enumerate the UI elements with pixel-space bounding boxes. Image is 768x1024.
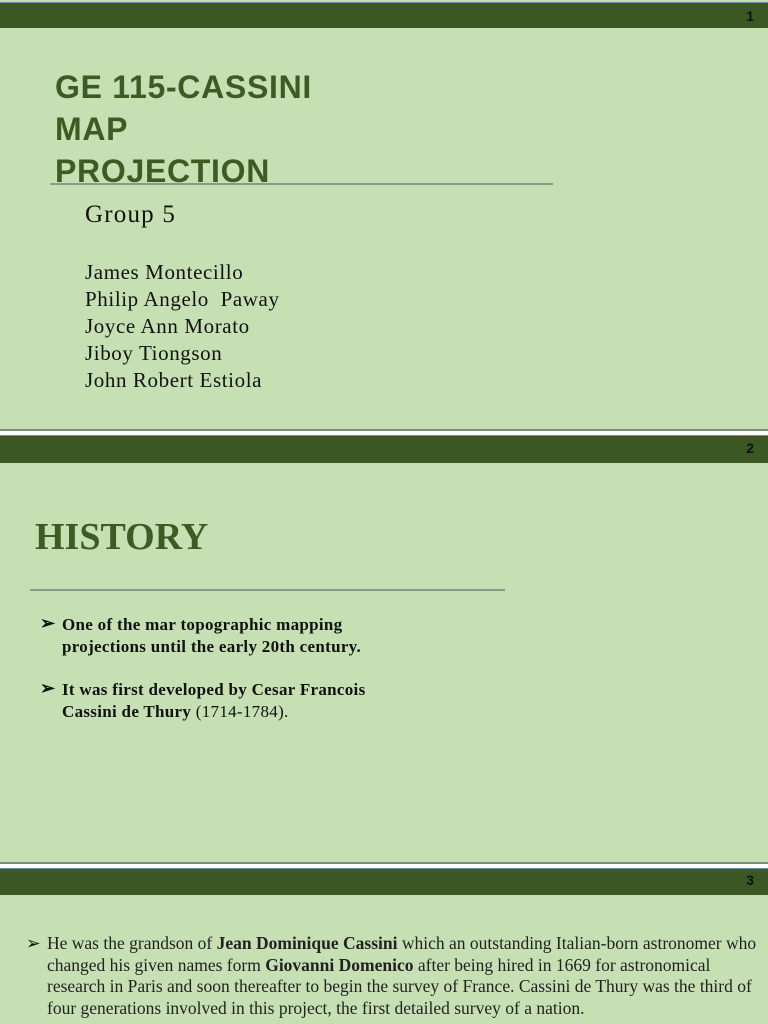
paragraph: ➢ xyxy=(26,933,41,953)
paragraph: four generations involved in this project, the first detailed survey of a nation. xyxy=(47,998,584,1018)
history bullets: ➢ xyxy=(40,678,55,698)
header bar 1 xyxy=(0,2,768,28)
history bullets: One of the mar topographic mapping xyxy=(62,615,342,634)
history bullets: Cassini de Thury (1714-1784). xyxy=(62,702,289,721)
paragraph xyxy=(26,933,756,1018)
group label: Group 5 xyxy=(85,201,176,228)
header bar 3: 3 xyxy=(746,872,754,888)
history bullets: projections until the early 20th century. xyxy=(62,637,361,656)
member names xyxy=(85,260,280,392)
history bullets xyxy=(40,613,366,721)
paragraph: changed his given names form Giovanni Domenico after being hired in 1669 for astronomical xyxy=(47,954,710,974)
header bar 2 xyxy=(0,435,768,463)
heading history: HISTORY xyxy=(35,516,208,558)
title: PROJECTION xyxy=(55,153,270,189)
title xyxy=(55,69,312,189)
slide 3 xyxy=(0,868,768,1024)
slide 2 xyxy=(0,435,768,865)
title: GE 115-CASSINI xyxy=(55,69,312,105)
member names: John Robert Estiola xyxy=(85,368,262,392)
header bar 2: 2 xyxy=(746,440,754,456)
history bullets: It was first developed by Cesar Francois xyxy=(62,680,366,699)
header bar 1: 1 xyxy=(746,8,754,24)
slide 1 xyxy=(0,0,768,430)
member names: James Montecillo xyxy=(85,260,243,284)
title: MAP xyxy=(55,111,128,147)
member names: Philip Angelo Paway xyxy=(85,287,280,311)
member names: Joyce Ann Morato xyxy=(85,314,250,338)
history bullets: ➢ xyxy=(40,613,55,633)
paragraph: He was the grandson of Jean Dominique Cassini which an outstanding Italian-born astronomer who xyxy=(47,933,756,953)
paragraph: research in Paris and soon thereafter to begin the survey of France. Cassini de Thury was the third of xyxy=(47,976,752,996)
member names: Jiboy Tiongson xyxy=(85,341,222,365)
header bar 3 xyxy=(0,868,768,895)
